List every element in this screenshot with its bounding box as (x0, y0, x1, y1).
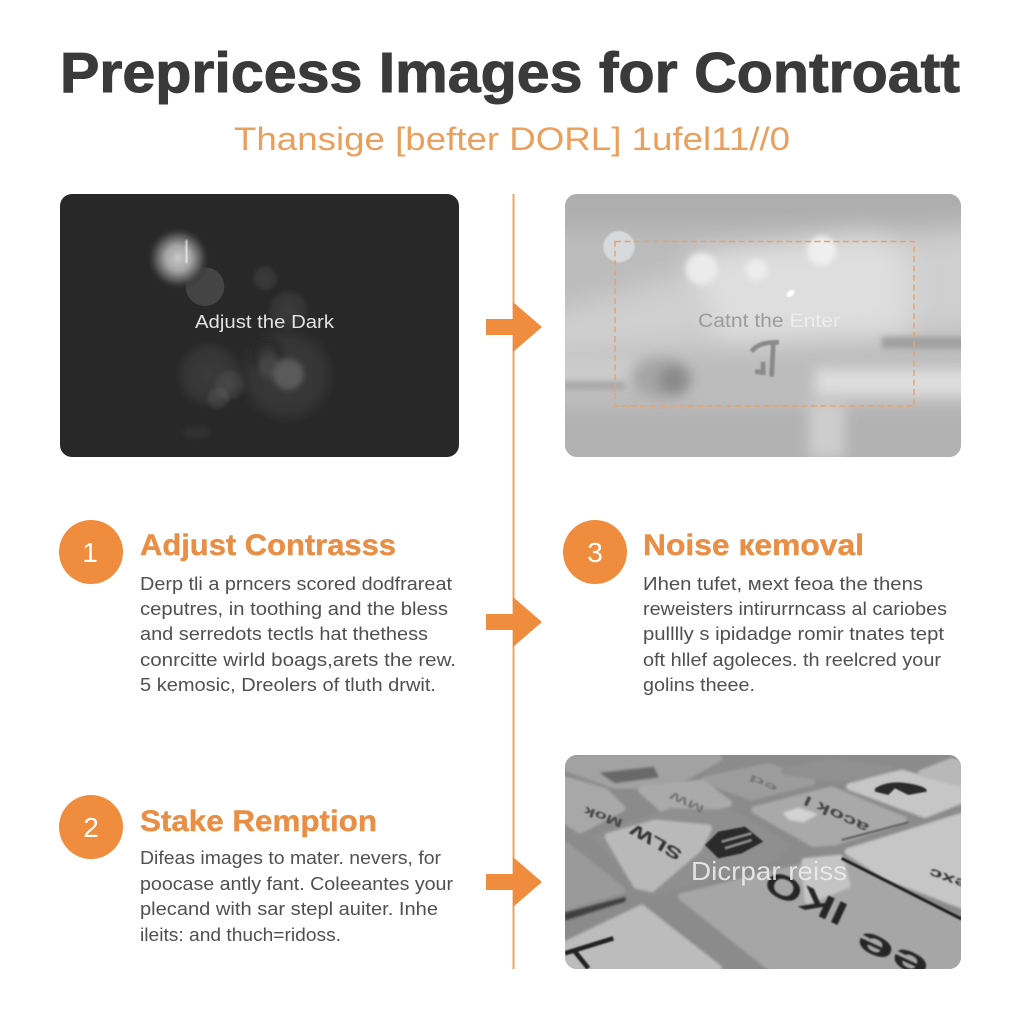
key legends: exc (927, 865, 969, 892)
icon: blurred logo mark (752, 342, 779, 377)
key legends: ed (748, 771, 780, 794)
step 1 badge: 1 (82, 537, 98, 568)
panel: step 3 (563, 520, 947, 695)
step 1 text: and serredots tectls hat thethess (140, 624, 428, 644)
step 3 text: golins theee. (643, 675, 755, 695)
image label: keyboard: Dicrpar reiss (691, 856, 847, 886)
step 2 badge (59, 795, 123, 859)
infographic (59, 50, 961, 969)
panel: brightened image (565, 194, 961, 457)
step 1 heading: Adjust Contrasss (140, 529, 396, 562)
step 3 badge: 3 (587, 537, 603, 568)
step 3 text: pulllly s ipidadge romir tnates tept (643, 624, 944, 644)
key legends: ee (849, 922, 935, 990)
key legends: acok I (801, 793, 871, 837)
step 2 text (140, 848, 453, 945)
step 3 text: reweisters intirurrncass al cariobes (643, 599, 947, 619)
panel: keyboard image (565, 755, 961, 969)
arrow: top (486, 302, 542, 352)
dashed crop frame (615, 242, 914, 406)
image label: dark: Adjust the Dark (195, 311, 335, 332)
key legends: MW (666, 788, 706, 815)
step 1 text: ceputres, in toothing and the bless (140, 599, 448, 619)
step 2 text: Difeas images to mater. nevers, for (140, 848, 441, 868)
panel: dark image (60, 194, 459, 457)
step 1 badge (59, 520, 123, 584)
subtitle: Thansige [befter DORL] 1ufel11//0 (234, 121, 790, 157)
step 2 heading: Stake Remption (140, 805, 377, 838)
arrow: middle (486, 597, 542, 647)
arrow: bottom (486, 857, 542, 907)
key legends (584, 774, 961, 969)
step 2 text: poocase antly fant. Coleeantes your (140, 874, 453, 894)
step 2 badge: 2 (83, 812, 99, 843)
step 2 text: plecand with sar stepl auiter. Inhe (140, 899, 438, 919)
step 1 text: conrcitte wirld boags,arets the rew. (140, 650, 456, 670)
step 3 badge (563, 520, 627, 584)
panel: step 1 (59, 520, 456, 695)
title: Prepricess Images for Controatt (60, 41, 960, 105)
key legends: IKO (759, 862, 853, 932)
step 1 text: Derp tli a prncers scored dodfrareat (140, 574, 452, 594)
step 1 text: 5 kemosic, Dreolers of tluth drwit. (140, 675, 436, 695)
image label: center: Catnt the Enter (698, 311, 841, 332)
step 3 heading: Noise кemoval (643, 529, 864, 562)
key legends: Mok (581, 803, 624, 830)
step 1 text (140, 574, 456, 695)
step 3 text (643, 574, 947, 695)
key legends: SLW (626, 819, 685, 863)
step 3 text: Иhen tufet, мext feoa the thens (643, 574, 923, 594)
panel: step 2 (59, 795, 453, 945)
step 3 text: oft hllef agoleces. th reelcred your (643, 650, 941, 670)
center divider line (512, 194, 514, 969)
step 2 text: ileits: and thuch=ridoss. (140, 925, 341, 945)
